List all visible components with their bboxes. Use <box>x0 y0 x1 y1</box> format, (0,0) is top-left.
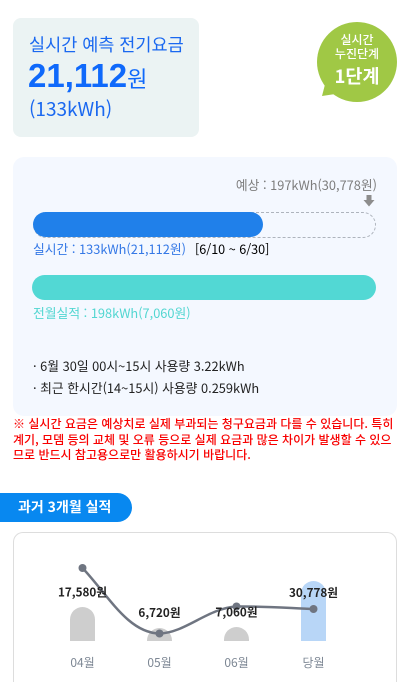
usage: 133kWh: (133kWh) <box>29 95 112 122</box>
panel: monthly chart <box>13 532 397 682</box>
label: date range: [6/10 ~ 6/30] <box>195 239 269 258</box>
bar: May <box>147 628 172 641</box>
point: June <box>232 602 240 610</box>
point: May <box>156 630 164 638</box>
bar: current month <box>301 581 326 641</box>
icon: down arrow <box>364 195 374 206</box>
amount: 21,112 won: 21,112원 <box>28 57 147 94</box>
label: forecast: 예상 : 197kWh(30,778원) <box>236 175 377 194</box>
bar: April <box>70 607 95 641</box>
line: monthly trend <box>82 568 314 634</box>
badge text: cumulative tier label <box>335 31 379 62</box>
labels: months <box>70 654 325 671</box>
heading: estimated bill: 실시간 예측 전기요금 <box>29 32 184 57</box>
bar: forecast outline <box>33 212 376 238</box>
badge text: cumulative tier label: 누진단계 <box>335 45 379 62</box>
chart: monthly bars and line <box>58 564 338 671</box>
badge text: cumulative tier label: 실시간 <box>340 31 374 48</box>
point: current month <box>310 605 318 613</box>
text: usage today: · 6월 30일 00시~15시 사용량 3.22kWh <box>33 356 245 375</box>
label: last month: 전월실적 : 198kWh(7,060원) <box>33 303 191 322</box>
panel: real-time estimated bill <box>13 18 199 137</box>
badge text: tier 1: 1단계 <box>335 63 379 89</box>
values: monthly amounts: 30,778원 <box>289 584 338 601</box>
bar: June <box>224 627 249 641</box>
icon: green bubble <box>317 22 397 102</box>
labels: months: 당월 <box>302 654 325 671</box>
values: monthly amounts: 17,580원 <box>58 584 107 600</box>
heading pill: past three months: 과거 3개월 실적 <box>18 497 111 517</box>
notice: red disclaimer: ※ 실시간 요금은 예상치로 실제 부과되는 청구요금과 다를 수 있습니다. 특히 계기, 모뎀 등의 교체 및 오류 등으로 실제 요금과 많은 차이가 발생할 수 있으므로 반드시 참고용으로만 활용하시기 바랍니다. <box>13 415 393 463</box>
values: monthly amounts: 6,720원 <box>138 604 181 621</box>
heading pill: past three months <box>0 493 132 522</box>
text: recent hour usage: · 최근 한시간(14~15시) 사용량 0.259kWh <box>33 378 259 397</box>
point: April <box>78 564 86 572</box>
panel: usage comparison <box>13 157 397 416</box>
values: monthly amounts <box>58 584 338 621</box>
badge: tier speech bubble <box>317 22 397 102</box>
labels: months: 05월 <box>147 654 172 671</box>
labels: months: 06월 <box>224 654 249 671</box>
label: real-time usage: 실시간 : 133kWh(21,112원) <box>33 239 186 258</box>
bar: last month <box>32 275 376 300</box>
bar: real-time usage <box>33 212 263 237</box>
labels: months: 04월 <box>70 654 95 671</box>
values: monthly amounts: 7,060원 <box>215 604 258 620</box>
